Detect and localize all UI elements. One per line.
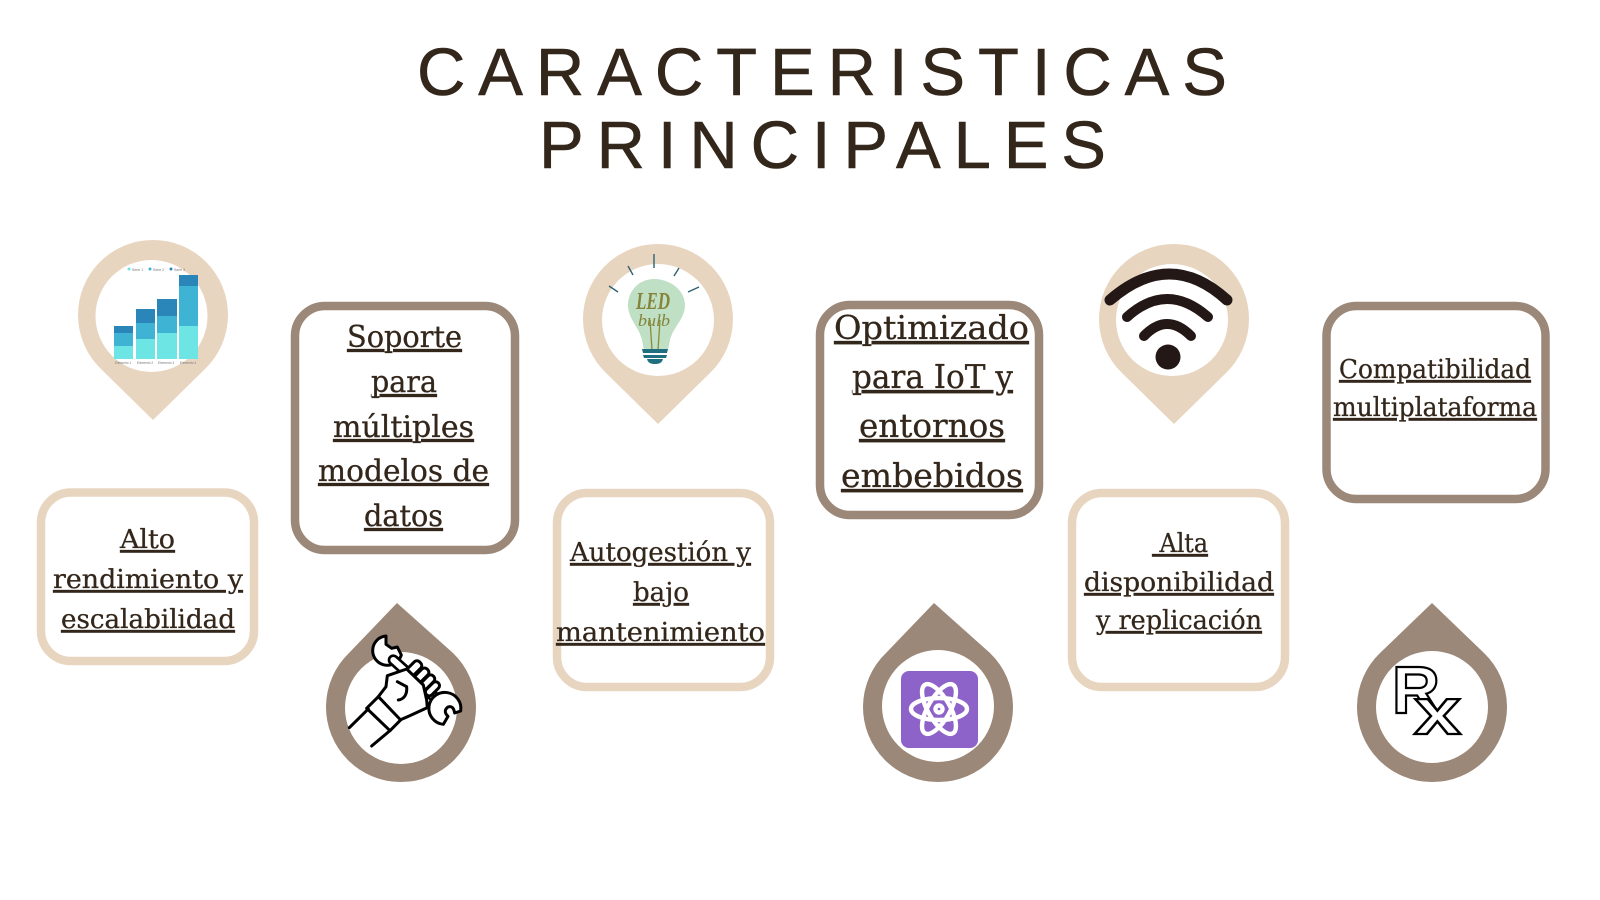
icon: LED bulb pin: LED (635, 289, 670, 315)
stacked bar chart: Serie 3 (174, 268, 185, 272)
stacked bar chart (114, 268, 198, 365)
panel: autogestión y bajo mantenimiento: bajo (633, 578, 689, 608)
panel: alto rendimiento y escalabilidad: Alto (119, 525, 175, 555)
panel: alta disponibilidad y replicación: y replicación (1095, 606, 1262, 636)
panel: alta disponibilidad y replicación: Alta (1152, 529, 1208, 559)
panel: soporte para múltiples modelos de datos: modelos de (318, 454, 489, 489)
icon: LED bulb pin (583, 244, 733, 424)
panel: alto rendimiento y escalabilidad: rendimiento y (53, 565, 243, 595)
panel: alto rendimiento y escalabilidad: escalabilidad (61, 605, 235, 635)
panel: soporte para múltiples modelos de datos: para (371, 365, 437, 400)
panel: alta disponibilidad y replicación: disponibilidad (1084, 568, 1274, 598)
title (417, 35, 1227, 183)
icon: Rx drop: R (1392, 653, 1440, 728)
title: PRINCIPALES (539, 108, 1106, 183)
title: CARACTERISTICAS (417, 35, 1227, 110)
stacked bar chart: Serie 2 (153, 268, 164, 272)
icon: LED bulb pin: bulb (638, 311, 670, 330)
icon: Rx drop: x (1414, 674, 1461, 748)
stacked bar chart: Elemento 3 (158, 361, 174, 365)
panel: optimizado para IoT y entornos embebidos (820, 305, 1039, 515)
icon: wrench drop (326, 603, 476, 782)
stacked bar chart: Elemento 4 (180, 361, 196, 365)
panel: soporte para múltiples modelos de datos: datos (364, 499, 443, 534)
panel: alto rendimiento y escalabilidad (41, 492, 254, 661)
panel: autogestión y bajo mantenimiento: mantenimiento (556, 618, 765, 648)
panel: soporte para múltiples modelos de datos (295, 306, 515, 550)
stacked bar chart: Elemento 2 (137, 361, 153, 365)
panel: compatibilidad multiplataforma: Compatibilidad (1339, 355, 1531, 385)
panel: optimizado para IoT y entornos embebidos: para IoT y (852, 357, 1013, 396)
panel: soporte para múltiples modelos de datos: Soporte (347, 320, 462, 355)
stacked bar chart: Serie 1 (132, 268, 143, 272)
panel: optimizado para IoT y entornos embebidos: entornos (859, 406, 1005, 445)
icon: chart pin (78, 240, 228, 420)
icon: wifi pin (1099, 244, 1249, 424)
panel: optimizado para IoT y entornos embebidos: Optimizado (834, 308, 1029, 347)
icon: atom drop (863, 603, 1013, 782)
icon: Rx drop (1357, 603, 1507, 782)
stacked bar chart: Elemento 1 (115, 361, 131, 365)
panel: compatibilidad multiplataforma: multiplataforma (1333, 393, 1537, 423)
panel: autogestión y bajo mantenimiento: Autogestión y (569, 538, 751, 568)
panel: autogestión y bajo mantenimiento (556, 493, 770, 687)
panel: soporte para múltiples modelos de datos: múltiples (333, 410, 474, 445)
panel: optimizado para IoT y entornos embebidos: embebidos (841, 456, 1023, 495)
panel: alta disponibilidad y replicación (1072, 493, 1285, 687)
panel: compatibilidad multiplataforma (1326, 306, 1546, 499)
